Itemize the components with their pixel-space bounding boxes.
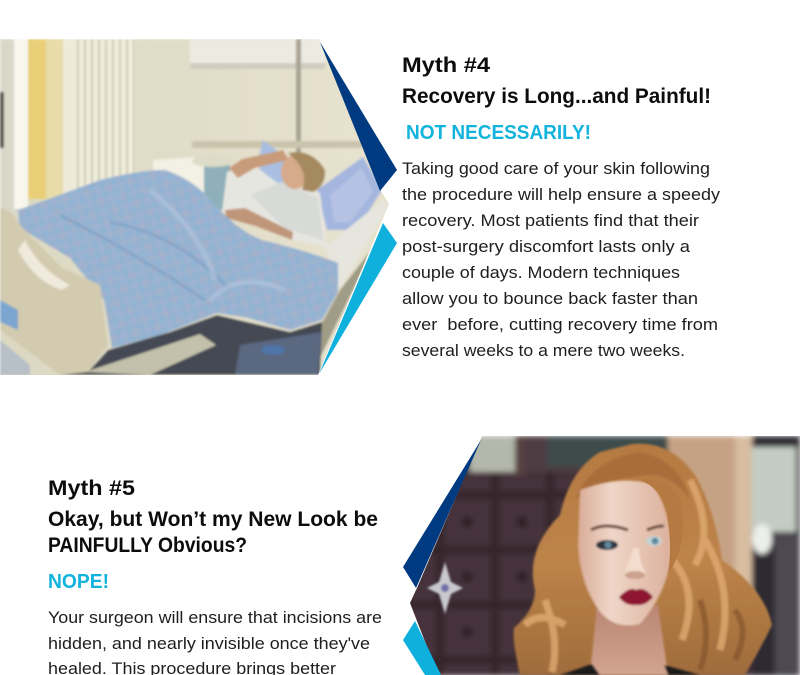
eyes: [596, 540, 618, 550]
heading: Myth 4: Recovery is Long...and Painful!: [402, 84, 711, 108]
heading: Myth 4: [402, 53, 711, 108]
text block: Myth 4 explanation: ever before, cutting recovery time from: [402, 315, 718, 334]
blanket: [18, 170, 338, 348]
cyan accent shape: Myth 5 photo: [403, 621, 441, 675]
hair: [514, 444, 772, 675]
hair over face: [640, 479, 683, 575]
heading: Myth 5: [48, 476, 378, 557]
text block: Myth 5 explanation: Your surgeon will ensure that incisions are: [48, 608, 382, 627]
eyebrows: [591, 526, 664, 530]
navy accent shape: Myth 5 photo: [403, 440, 481, 588]
text block: Myth 4 explanation: allow you to bounce back faster than: [402, 289, 698, 308]
text block: Myth 4 explanation: post-surgery discomfort lasts only a: [402, 237, 691, 256]
text block: Myth 4 explanation: Taking good care of your skin following: [402, 159, 710, 178]
text block: Myth 5 explanation: [48, 608, 382, 675]
heading: Myth 4: Myth #4: [402, 53, 490, 77]
text block: Myth 4 explanation: [402, 159, 721, 360]
ornament star on door: [427, 562, 463, 614]
answer: nope: NOPE!: [48, 570, 109, 593]
photo: patient resting in hospital bed: [0, 39, 400, 379]
pillows behind the patient: [258, 140, 382, 230]
patient in gown: [222, 150, 327, 247]
nose: [625, 548, 646, 574]
text block: Myth 5 explanation: hidden, and nearly invisible once they've: [48, 634, 370, 653]
answer: not necessarily: NOT NECESSARILY!: [406, 121, 591, 144]
neck and dark top: [560, 605, 700, 675]
lips: [619, 589, 653, 605]
photo: woman with wavy red-blonde hair: [400, 436, 800, 675]
text block: Myth 4 explanation: the procedure will help ensure a speedy: [402, 185, 721, 204]
text block: Myth 4 explanation: several weeks to a mere two weeks.: [402, 341, 685, 360]
heading: Myth 5: Myth #5: [48, 476, 135, 500]
face: [578, 481, 672, 626]
cyan accent shape: Myth 4 photo: [319, 223, 397, 374]
text block: Myth 4 explanation: couple of days. Modern techniques: [402, 263, 680, 282]
navy accent shape: Myth 4 photo: [320, 42, 397, 191]
text block: Myth 4 explanation: recovery. Most patients find that their: [402, 211, 699, 230]
bed rail: [0, 208, 108, 375]
heading: Myth 5: PAINFULLY Obvious?: [48, 533, 247, 557]
heading: Myth 5: Okay, but Won’t my New Look be: [48, 507, 378, 531]
